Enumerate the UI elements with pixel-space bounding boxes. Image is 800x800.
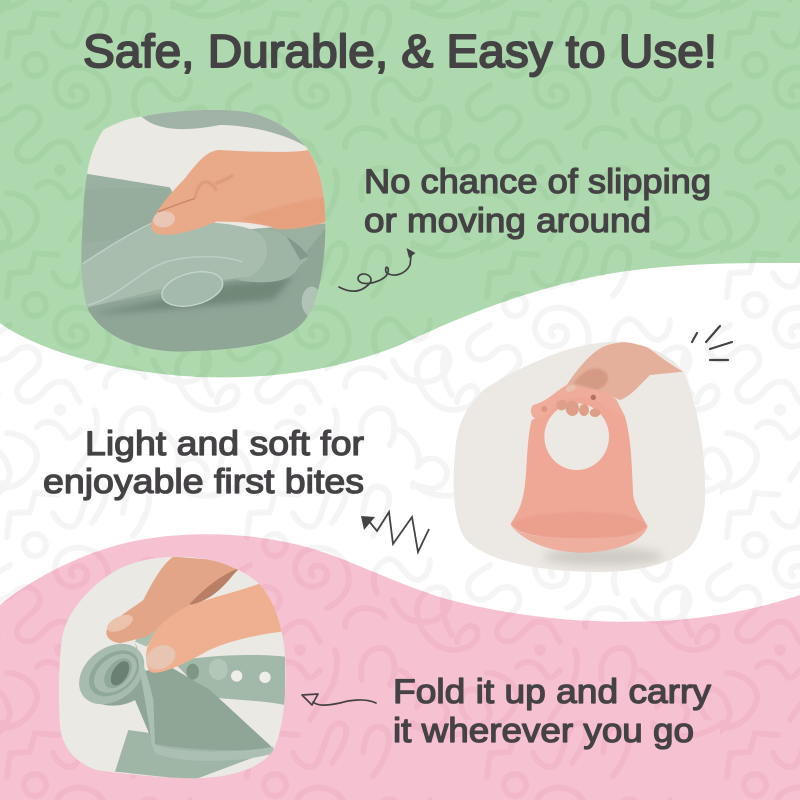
text: light and soft: enjoyable first bites: [43, 463, 364, 501]
photo: fingers folding green mat: [59, 556, 286, 778]
text: light and soft: [43, 425, 364, 501]
arrow: curly arrow to text: [339, 248, 416, 291]
pink bottom wave panel: [0, 534, 800, 800]
title: Safe, Durable, & Easy to Use!: [83, 25, 717, 77]
text: light and soft: Light and soft for: [85, 425, 364, 463]
photo: hand pressing green mat: [81, 110, 326, 352]
arrow: hand-drawn arrow to photo: [302, 694, 376, 705]
icon: burst lines: [692, 326, 732, 360]
arrow: zigzag arrow: [361, 512, 429, 552]
photo: pink bib held by a hand: [454, 342, 705, 572]
text: no chance of slipping: [364, 163, 711, 240]
green top wave panel: [0, 0, 800, 377]
text: fold it up: Fold it up and carry: [393, 673, 711, 711]
text: no chance of slipping: No chance of slipping: [364, 163, 711, 201]
text: fold it up: [393, 673, 711, 750]
text: no chance of slipping: or moving around: [364, 202, 651, 240]
text: fold it up: it wherever you go: [393, 712, 694, 750]
